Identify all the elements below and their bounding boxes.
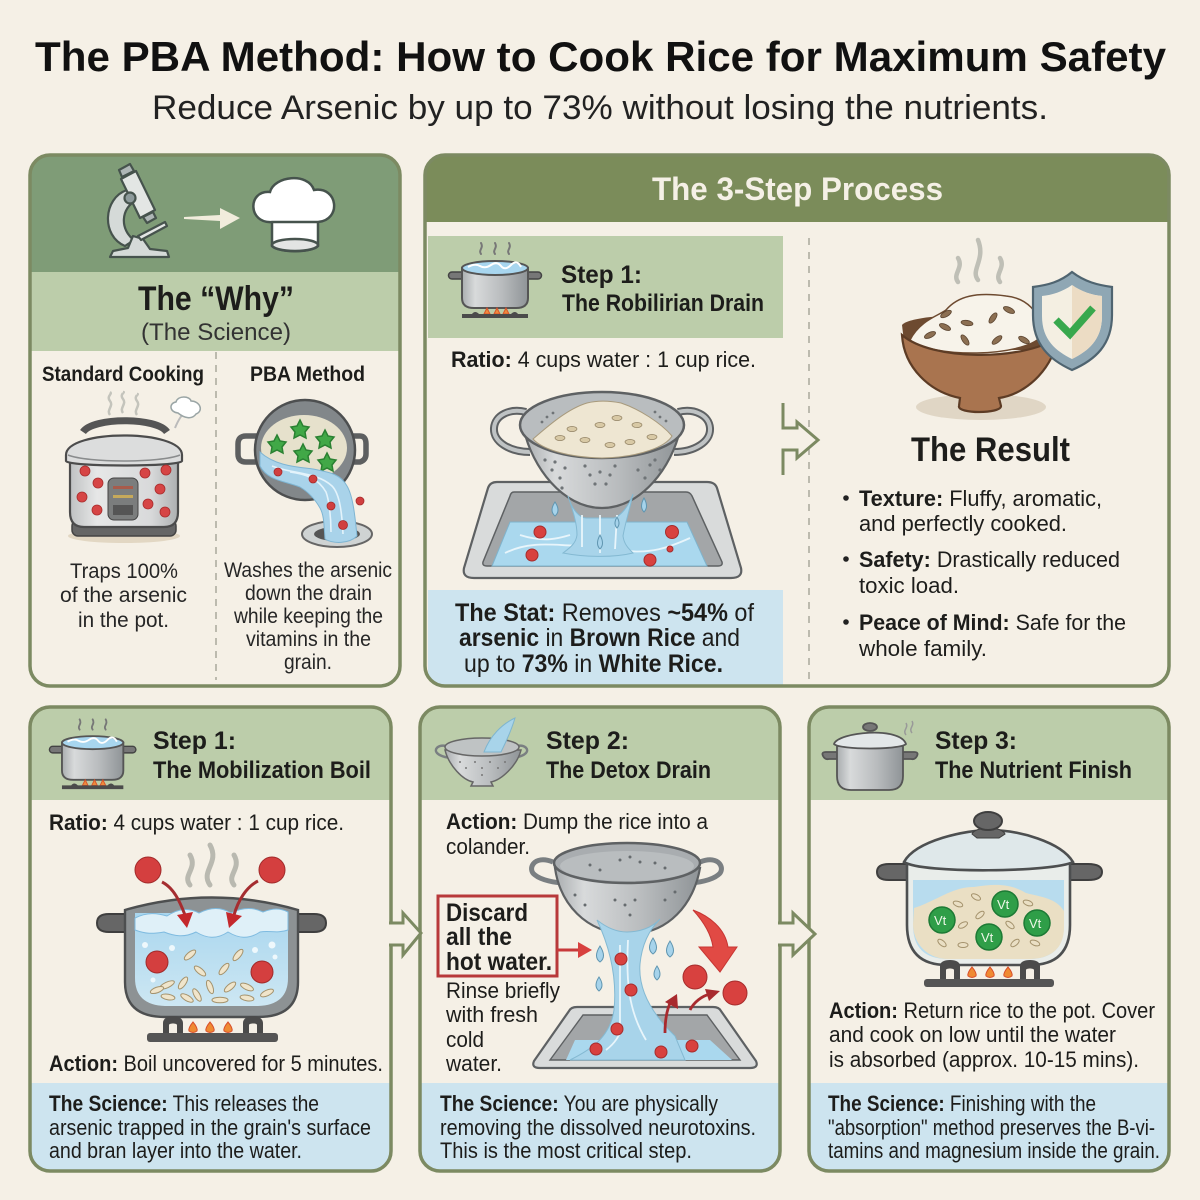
callout: the stat: The Stat: Removes ~54% of [455, 599, 754, 627]
callout: discard hot water [438, 896, 592, 976]
text: standard cooking: in the pot. [78, 609, 169, 632]
arrow: process to result [783, 403, 818, 475]
callout: the science [828, 1091, 1160, 1163]
heading: step 2 [546, 727, 711, 784]
callout: discard hot water: Discard [446, 899, 528, 927]
callout: the science [440, 1091, 756, 1163]
panel: the why [30, 155, 400, 686]
icon: small colander [436, 718, 527, 786]
callout: the science [49, 1091, 371, 1163]
arrow: step 1 to step 2 [389, 913, 421, 955]
title: The PBA Method: How to Cook Rice for Maximum Safety [35, 33, 1167, 80]
text: rinse: water. [445, 1051, 502, 1076]
list: result benefits: whole family. [858, 636, 987, 661]
divider column label: standard cooking: Standard Cooking [42, 363, 204, 386]
heading: step 1: Step 1: [153, 727, 236, 755]
illustration: boiling pot with arsenic [97, 845, 326, 1042]
text: action: Action: Dump the rice into a [446, 809, 709, 834]
callout: the stat: up to 73% in White Rice. [464, 650, 723, 678]
panel: step 1 the mobilization boil [30, 707, 391, 1171]
subheading: the science: (The Science) [141, 319, 291, 346]
text: standard cooking [60, 560, 187, 632]
callout: the science: and bran layer into the water. [49, 1138, 302, 1163]
text: action: and cook on low until the water [829, 1022, 1116, 1047]
list: result benefits: and perfectly cooked. [859, 511, 1067, 536]
illustration: covered pot with rice and vitamins: Vt [981, 930, 994, 945]
callout: the science: The Science: This releases the [49, 1091, 319, 1116]
icon: microscope [108, 164, 169, 257]
icon: pot pouring out arsenic water [238, 400, 372, 547]
icon: small boiling pot [49, 719, 136, 789]
callout: discard hot water: all the [446, 923, 512, 951]
heading: the why: The “Why” [138, 280, 294, 318]
text: PBA method: while keeping the [233, 605, 383, 628]
callout: the science: The Science: Finishing with the [828, 1091, 1096, 1116]
text: rinse [445, 978, 560, 1076]
text: PBA method: grain. [284, 651, 332, 674]
subtitle: Reduce Arsenic by up to 73% without losing the nutrients. [152, 89, 1048, 127]
heading: step 3 [935, 727, 1132, 784]
text: action: colander. [446, 834, 530, 859]
heading: step 2: Step 2: [546, 727, 629, 755]
callout: the science: removing the dissolved neurotoxins. [440, 1115, 756, 1140]
list: result benefits: Safety: Drastically reduced [859, 547, 1120, 572]
icon: small covered pot [822, 721, 918, 790]
illustration: covered pot with rice and vitamins: Vt [1029, 916, 1042, 931]
list: result benefits: Peace of Mind: Safe for the [859, 610, 1126, 635]
heading: step 1: The Mobilization Boil [153, 757, 371, 784]
text: action: is absorbed (approx. 10-15 mins). [829, 1047, 1139, 1072]
heading: step 1: The Robilirian Drain [562, 290, 764, 317]
icon: chef hat [253, 178, 334, 251]
heading: step 1 [561, 261, 764, 317]
panel: step 3 the nutrient finish [809, 707, 1169, 1171]
callout: the science: The Science: You are physically [440, 1091, 718, 1116]
callout: the science: arsenic trapped in the grain's surface [49, 1115, 371, 1140]
text: standard cooking: Traps 100% [70, 560, 178, 583]
icon: rice cooker with arsenic [66, 392, 200, 543]
panel: step 2 the detox drain [420, 707, 780, 1171]
text: PBA method: vitamins in the [246, 628, 371, 651]
list: result benefits [843, 486, 1126, 661]
heading: step 3: The Nutrient Finish [935, 757, 1132, 784]
text: standard cooking: of the arsenic [60, 584, 187, 607]
illustration: covered pot with rice and vitamins [877, 812, 1102, 987]
text: ratio: Ratio: 4 cups water : 1 cup rice. [451, 347, 756, 372]
text: action: Action: Return rice to the pot. Cover [829, 998, 1155, 1023]
heading: step 1: Step 1: [561, 261, 642, 289]
callout: discard hot water: hot water. [446, 948, 552, 976]
heading: step 2: The Detox Drain [546, 757, 711, 784]
arrow: step 2 to step 3 [778, 913, 815, 955]
heading: the 3-step process: The 3-Step Process [652, 171, 943, 207]
heading: step 1 [153, 727, 371, 784]
text: rinse: Rinse briefly [446, 978, 560, 1003]
text: action [829, 998, 1155, 1072]
text: rinse: with fresh [445, 1002, 538, 1027]
text: action: Action: Boil uncovered for 5 minutes. [49, 1051, 383, 1076]
text: action [446, 809, 709, 859]
text: PBA method [224, 559, 392, 674]
arrow: science to cooking [184, 208, 240, 229]
list: result benefits: toxic load. [859, 573, 959, 598]
illustration: colander draining over sink [532, 843, 757, 1068]
icon: colander over sink [464, 392, 741, 578]
heading: step 3: Step 3: [935, 727, 1017, 755]
heading: the result: The Result [911, 431, 1070, 469]
column label: PBA method: PBA Method [250, 363, 365, 386]
text: rinse: cold [446, 1027, 484, 1052]
text: PBA method: Washes the arsenic [224, 559, 392, 582]
list: result benefits: Texture: Fluffy, aromatic, [859, 486, 1102, 511]
icon: rice bowl with shield [902, 240, 1112, 420]
illustration: covered pot with rice and vitamins: Vt [934, 913, 947, 928]
illustration: covered pot with rice and vitamins: Vt [997, 897, 1010, 912]
text: ratio: Ratio: 4 cups water : 1 cup rice. [49, 810, 344, 835]
panel: the 3-step process [425, 155, 1169, 686]
text: PBA method: down the drain [245, 582, 372, 605]
callout: the science: This is the most critical step. [440, 1138, 692, 1163]
callout: the stat [455, 599, 754, 678]
callout: the stat: arsenic in Brown Rice and [459, 624, 740, 652]
icon: boiling pot [449, 243, 542, 318]
